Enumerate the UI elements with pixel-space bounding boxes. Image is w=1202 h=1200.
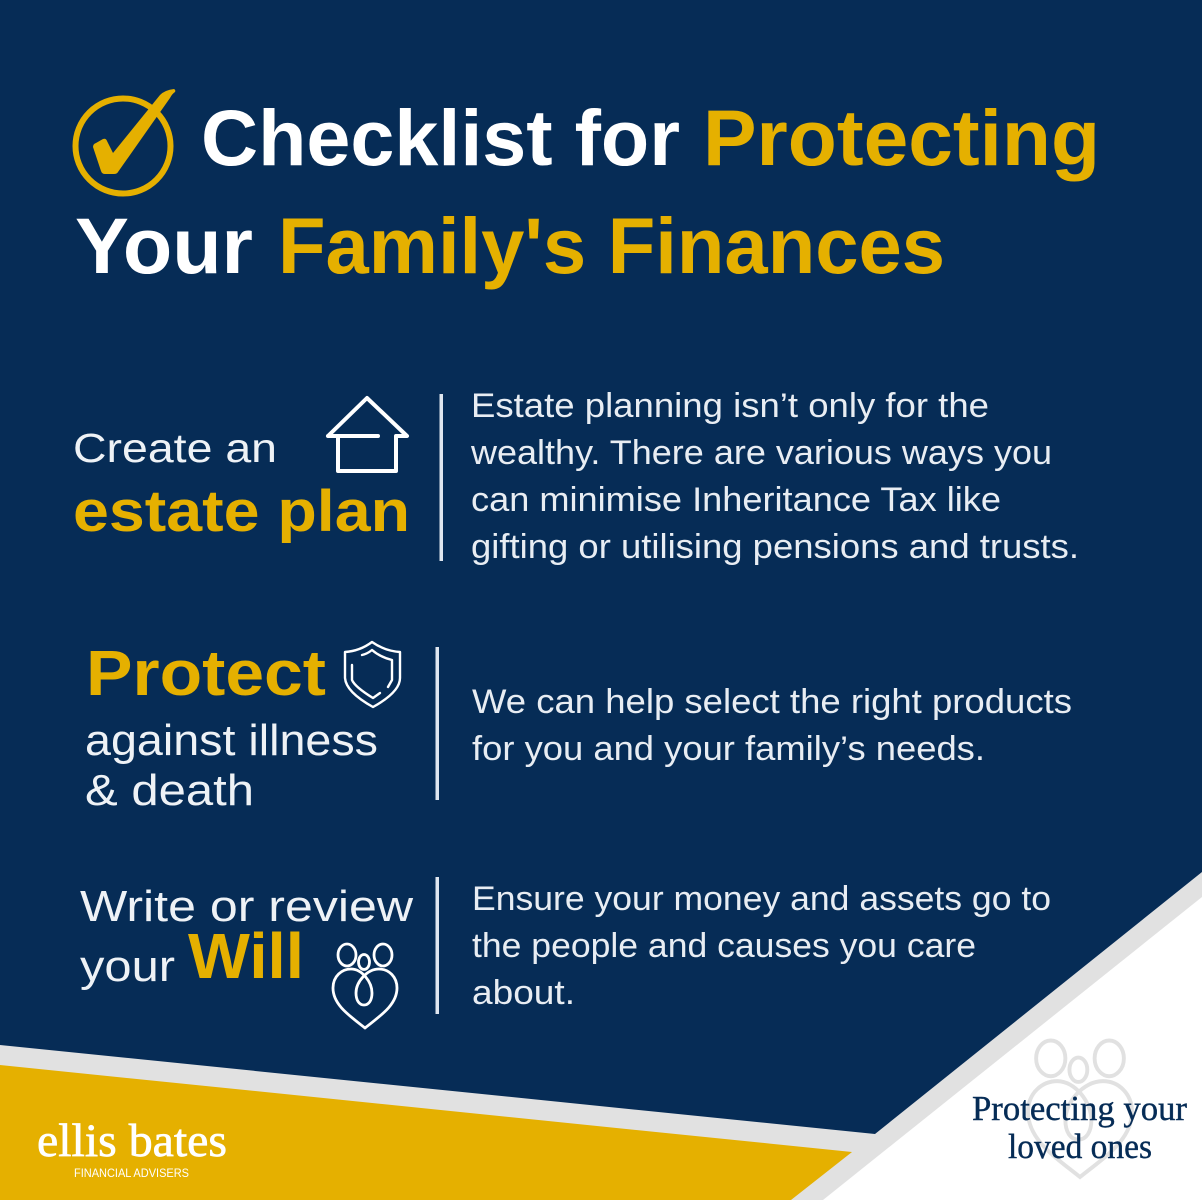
heading: write or review your will bbox=[80, 882, 413, 992]
text: protect description: for you and your family’s needs. bbox=[472, 730, 985, 768]
text: will description: the people and causes you care bbox=[472, 927, 976, 965]
text: estate planning description bbox=[470, 387, 1079, 566]
heading: create an estate plan bbox=[73, 425, 410, 544]
logo: ellis bates: FINANCIAL ADVISERS bbox=[74, 1166, 189, 1180]
panel: estate plan bbox=[73, 387, 1079, 566]
heading: create an estate plan: Create an bbox=[73, 425, 277, 471]
tagline: protecting your loved ones bbox=[972, 1089, 1187, 1166]
footer: yellow panel bbox=[0, 1065, 852, 1200]
title: Checklist for bbox=[201, 93, 680, 182]
text: estate planning description: can minimise Inheritance Tax like bbox=[471, 481, 1001, 519]
heading: write or review your will: Write or review bbox=[80, 882, 413, 931]
heading: protect against illness and death bbox=[85, 637, 378, 815]
text: estate planning description: Estate planning isn’t only for the bbox=[471, 387, 989, 425]
text: protect description: We can help select the right products bbox=[472, 683, 1072, 721]
text: estate planning description: gifting or utilising pensions and trusts. bbox=[471, 528, 1079, 566]
tagline: protecting your loved ones: loved ones bbox=[1008, 1127, 1152, 1166]
text: will description bbox=[472, 880, 1051, 1012]
footer: grey band bbox=[0, 872, 1202, 1200]
icon: house bbox=[328, 398, 407, 471]
heading: protect against illness and death: & death bbox=[85, 766, 254, 815]
text: will description: Ensure your money and assets go to bbox=[472, 880, 1051, 918]
icon: shield bbox=[345, 642, 400, 707]
panel: will bbox=[80, 877, 1051, 1028]
heading: write or review your will: your bbox=[80, 942, 175, 991]
title: Your bbox=[75, 201, 253, 290]
icon: circled check mark bbox=[76, 89, 175, 194]
heading: create an estate plan: estate plan bbox=[73, 479, 410, 544]
heading: write or review your will: Will bbox=[188, 920, 304, 992]
text: will description: about. bbox=[472, 974, 575, 1012]
title: Family's Finances bbox=[278, 201, 945, 290]
heading: protect against illness and death: against illness bbox=[85, 716, 378, 765]
footer: white corner bbox=[823, 897, 1202, 1200]
logo: ellis bates: ellis bates bbox=[37, 1115, 227, 1167]
icon: watermark family heart bbox=[1028, 1040, 1132, 1177]
icon: family heart bbox=[333, 944, 397, 1028]
panel: protect bbox=[85, 637, 1072, 815]
text: protect description bbox=[472, 683, 1072, 768]
title bbox=[75, 93, 1100, 290]
title: Protecting bbox=[703, 93, 1100, 182]
text: estate planning description: wealthy. There are various ways you bbox=[470, 434, 1052, 472]
tagline: protecting your loved ones: Protecting your bbox=[972, 1089, 1187, 1128]
heading: protect against illness and death: Protect bbox=[86, 637, 326, 709]
